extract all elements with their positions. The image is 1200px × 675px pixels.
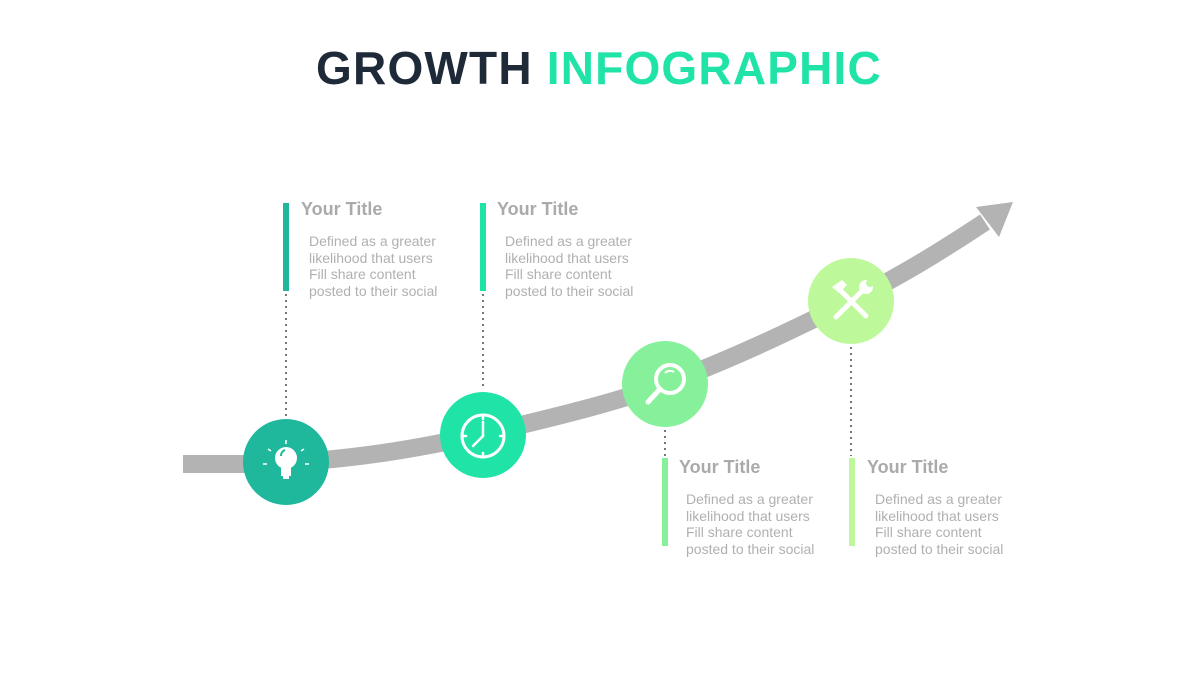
connector dotted lines: [286, 294, 851, 456]
arrow: growth curve: [183, 202, 1013, 464]
text block 1: likelihood that users: [309, 250, 433, 266]
text block 3: [662, 457, 814, 557]
text block 3: likelihood that users: [686, 508, 810, 524]
text block 1: Defined as a greater: [309, 233, 436, 249]
text block 4: likelihood that users: [875, 508, 999, 524]
icon: light bulb step: [243, 419, 329, 505]
text block 2: likelihood that users: [505, 250, 629, 266]
text block 4: posted to their social: [875, 541, 1003, 557]
text block 2: Defined as a greater: [505, 233, 632, 249]
text block 3: Your Title: [679, 457, 760, 477]
text block 1: [283, 199, 437, 299]
text block 1: Your Title: [301, 199, 382, 219]
icon: tools step: [808, 258, 894, 344]
text block 4: Fill share content: [875, 524, 982, 540]
text block 4: Defined as a greater: [875, 491, 1002, 507]
text block 4: Your Title: [867, 457, 948, 477]
text block 2: posted to their social: [505, 283, 633, 299]
text block 3: Defined as a greater: [686, 491, 813, 507]
text block 2: Fill share content: [505, 266, 612, 282]
text block 2: Your Title: [497, 199, 578, 219]
icon: magnifier step: [622, 341, 708, 427]
text block 4: [849, 457, 1003, 557]
text block 3: Fill share content: [686, 524, 793, 540]
text block 1: Fill share content: [309, 266, 416, 282]
text block 1: posted to their social: [309, 283, 437, 299]
title: GROWTH INFOGRAPHIC: [316, 42, 882, 94]
icon: clock step: [440, 392, 526, 478]
text block 2: [480, 199, 633, 299]
text block 3: posted to their social: [686, 541, 814, 557]
